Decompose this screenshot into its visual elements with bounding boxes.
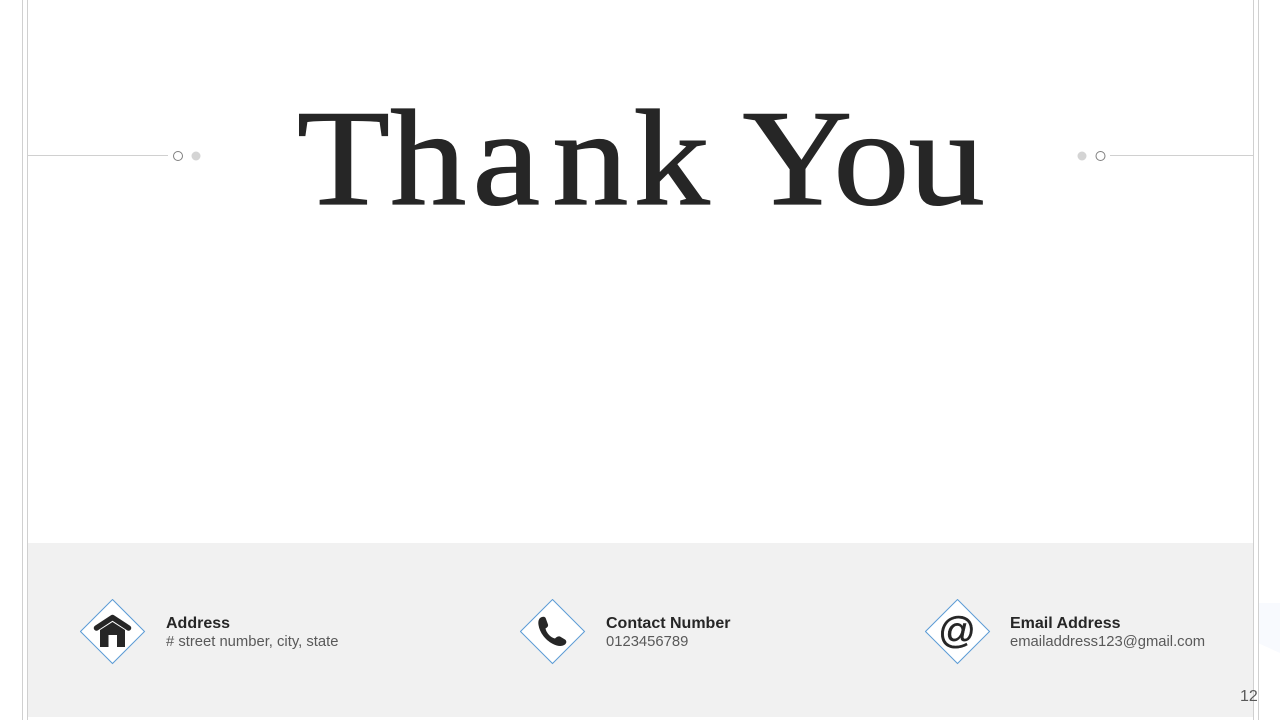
icon: at sign: @: [938, 610, 976, 651]
footer band: [28, 543, 1253, 717]
icon: address house: [80, 599, 146, 664]
email address text: emailaddress123@gmail.com: [1010, 634, 1205, 650]
address text: # street number, city, state: [166, 634, 338, 650]
faint decorative shape at right edge: [1258, 603, 1280, 653]
address text: [166, 615, 338, 650]
right frame lines: [1253, 0, 1259, 720]
email address text: Email Address: [1010, 615, 1121, 632]
address text: Address: [166, 615, 230, 632]
icon: phone: [520, 599, 586, 664]
contact number text: 0123456789: [606, 634, 688, 650]
contact number text: Contact Number: [606, 615, 730, 632]
contact number text: [606, 615, 730, 650]
icon: at sign: [925, 599, 990, 664]
page number: 12: [1240, 688, 1258, 705]
email address text: [1010, 615, 1205, 650]
left ornament: line and dots: [28, 151, 200, 161]
right ornament: line and dots: [1078, 151, 1253, 161]
title: Thank You: [297, 83, 987, 234]
left frame lines: [22, 0, 28, 720]
